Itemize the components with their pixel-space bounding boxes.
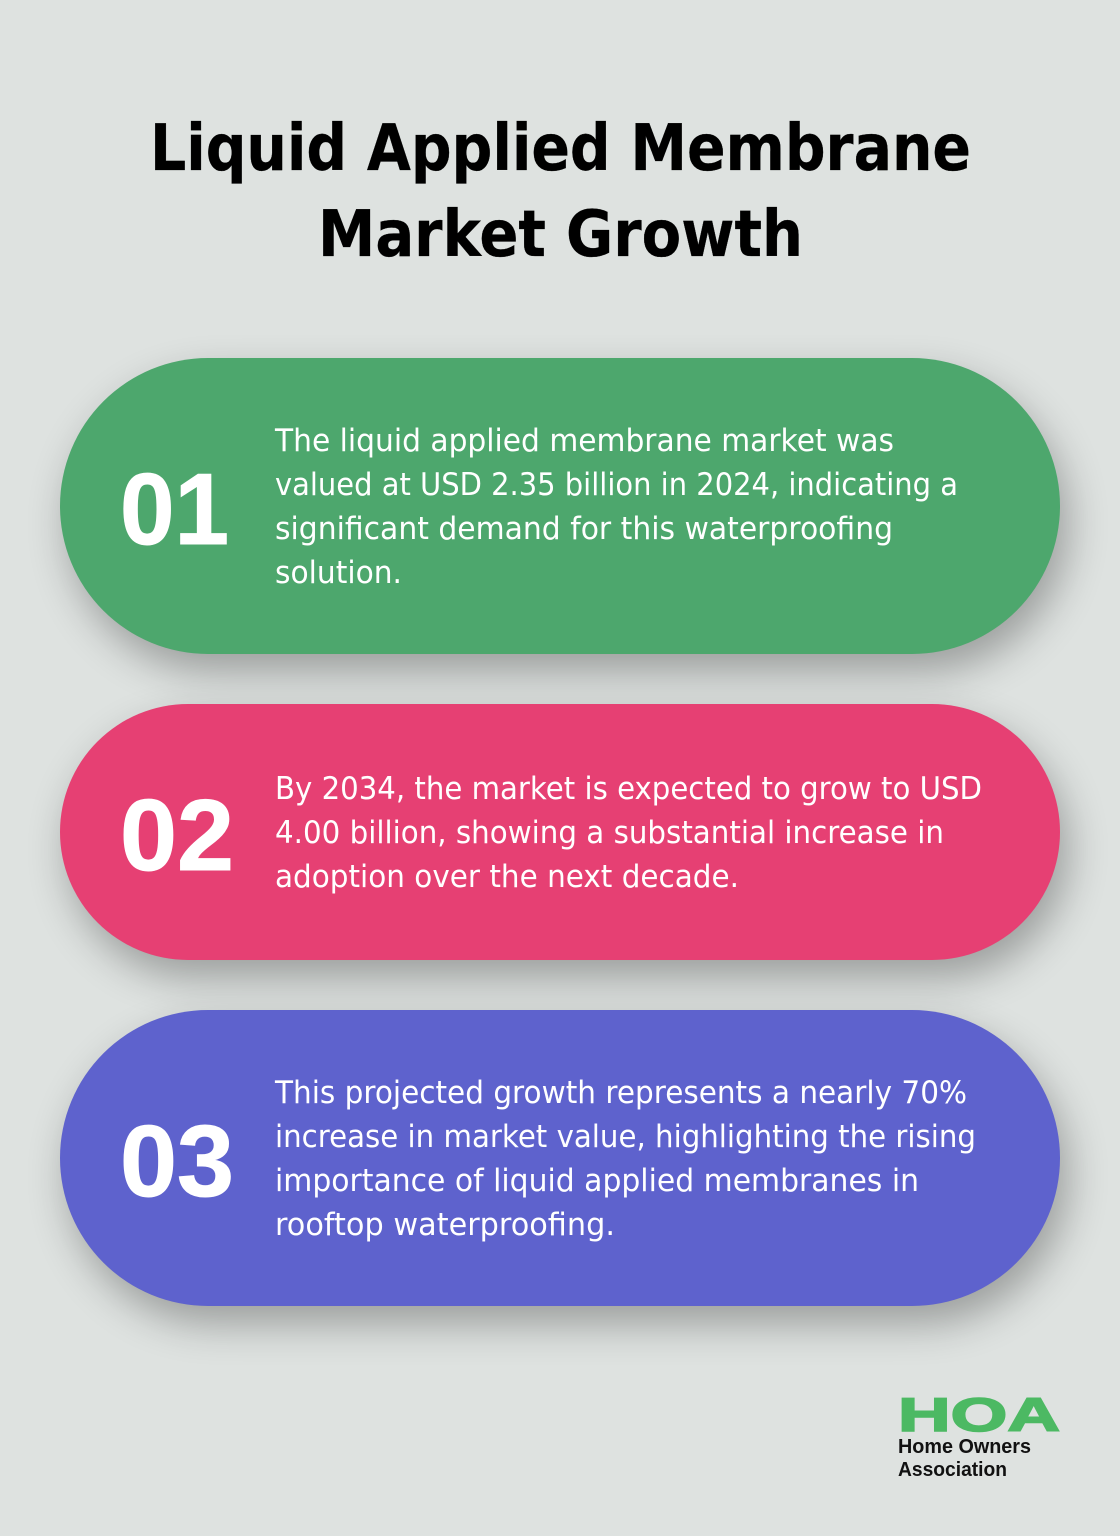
logo: HOA Home Owners Association: Association: [898, 1459, 1007, 1481]
card 1 text: The liquid applied membrane market was: [274, 423, 894, 459]
logo: HOA Home Owners Association: [898, 1388, 1060, 1481]
number 03: 03: [120, 1106, 234, 1218]
card 2 text: [275, 771, 982, 895]
card 3 text: This projected growth represents a nearly 70%: [274, 1075, 967, 1111]
card 2 text: By 2034, the market is expected to grow to USD: [275, 771, 982, 807]
title: Market Growth: [318, 198, 803, 272]
card 2 text: adoption over the next decade.: [275, 859, 739, 895]
card 2 text: 4.00 billion, showing a substantial increase in: [275, 815, 944, 851]
logo: HOA Home Owners Association: Home Owners: [898, 1436, 1031, 1458]
card 1 text: solution.: [275, 555, 402, 591]
card 3 text: increase in market value, highlighting the rising: [275, 1119, 976, 1155]
panel: card 3 background: [60, 1010, 1060, 1306]
panel: card 2 background: [60, 704, 1060, 960]
number 02: 02: [120, 780, 234, 892]
card 3 text: [274, 1075, 976, 1243]
title: Liquid Applied Membrane: [150, 112, 971, 186]
panel: card 1 background: [60, 358, 1060, 654]
card 1 text: valued at USD 2.35 billion in 2024, indicating a: [275, 467, 958, 503]
card 3 text: importance of liquid applied membranes in: [275, 1163, 919, 1199]
title: [150, 112, 971, 272]
card 3 text: rooftop waterproofing.: [275, 1207, 615, 1243]
logo: HOA Home Owners Association: HOA: [898, 1388, 1060, 1441]
card 1 text: [274, 423, 958, 591]
number 01: 01: [120, 454, 229, 566]
card 1 text: significant demand for this waterproofing: [275, 511, 893, 547]
